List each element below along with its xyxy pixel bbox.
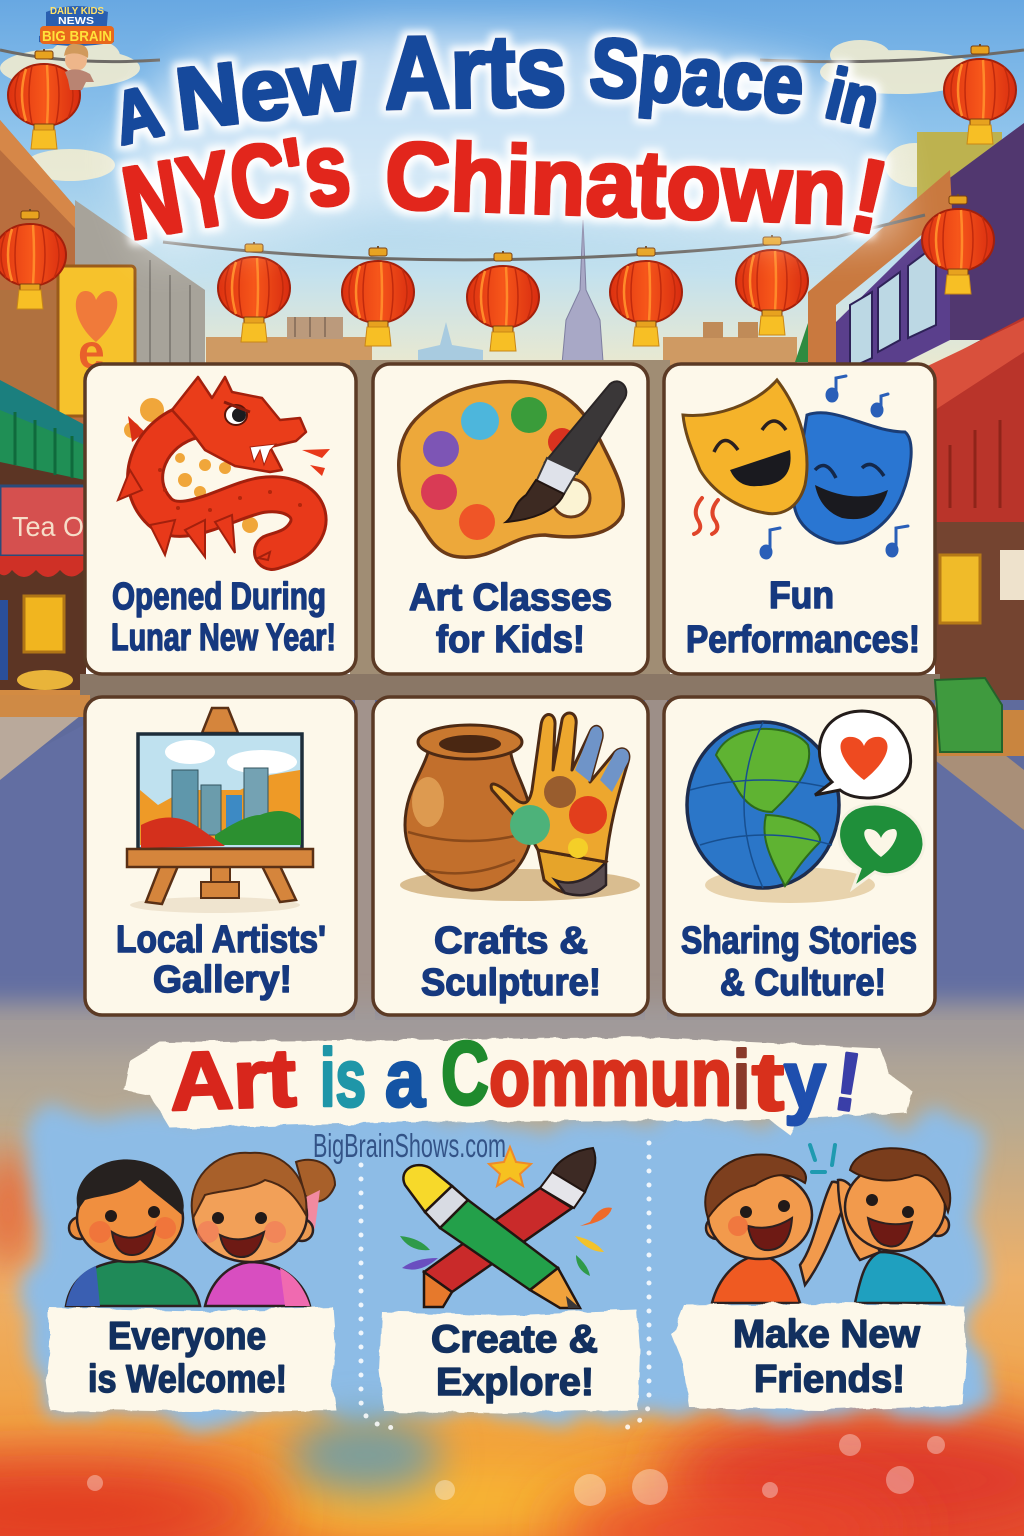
panel: sharing stories and culture [664, 697, 935, 1015]
heading: t [752, 1037, 784, 1128]
icon: painted hand [491, 713, 629, 895]
heading: a [385, 1033, 426, 1124]
background: lower watercolor wash [0, 1002, 1024, 1536]
title: New [170, 28, 363, 149]
icon: star [489, 1147, 531, 1186]
heading: Art [168, 1033, 298, 1128]
logo: Daily Kids News with Big Brain: BIG BRAIN [42, 28, 112, 45]
icon: heart speech bubble [815, 711, 911, 798]
title [105, 13, 897, 263]
title glow [115, 28, 900, 255]
logo: Daily Kids News with Big Brain: DAILY KIDS [50, 6, 104, 17]
label: Art Classes [409, 577, 612, 619]
title: Arts [383, 13, 567, 132]
logo: Daily Kids News with Big Brain: NEWS [58, 16, 94, 27]
icon: globe [687, 722, 875, 903]
label [409, 577, 612, 661]
label: Lunar New Year! [111, 617, 336, 659]
caption: create and explore: Explore! [436, 1361, 594, 1404]
shop sign with heart: e [78, 326, 105, 379]
dotted dividers [361, 1143, 649, 1428]
title: Chinatown [383, 122, 849, 245]
label: Fun [769, 575, 834, 617]
icon: music notes [761, 376, 908, 558]
caption: create and explore [379, 1310, 640, 1413]
panel: opened during lunar new year [85, 364, 356, 674]
tea shop sign: Tea O [12, 511, 84, 542]
illustration: crossed pencil and paintbrush [400, 1147, 612, 1308]
caption: make new friends: Make New [733, 1313, 921, 1356]
illustration: two smiling kids [66, 1153, 335, 1306]
label: Crafts & [434, 920, 588, 962]
heading: C [441, 1024, 489, 1124]
banner: art is a community [124, 1024, 911, 1135]
caption: everyone is welcome [46, 1307, 336, 1412]
label: & Culture! [720, 962, 886, 1004]
background: clouds [0, 38, 980, 187]
label: Gallery! [153, 959, 292, 1001]
label: Sharing Stories [681, 920, 917, 962]
label [111, 576, 336, 659]
label: Local Artists' [116, 919, 326, 961]
title: in [819, 54, 887, 144]
logo: Daily Kids News with Big Brain [39, 6, 114, 90]
tea shop sign [0, 486, 85, 556]
panel: art classes for kids [373, 364, 648, 674]
watermark: BigBrainShows.com [313, 1127, 506, 1164]
label [681, 920, 917, 1004]
background: street [0, 360, 1024, 1040]
heading: i [733, 1035, 750, 1126]
caption: everyone is welcome: is Welcome! [88, 1358, 287, 1401]
background: sky [0, 0, 1024, 380]
panel: fun performances [664, 364, 935, 674]
background: skyline [206, 220, 826, 377]
illustration: two kids high five [705, 1145, 950, 1303]
heading [168, 1024, 866, 1129]
heading: ommun [489, 1032, 732, 1123]
title: ! [841, 137, 897, 257]
icon: green speech bubble [839, 804, 924, 888]
title: A [105, 69, 170, 161]
lantern strings [0, 50, 1024, 260]
label [686, 575, 920, 661]
green crate [935, 678, 1002, 752]
heading: is [320, 1033, 366, 1124]
panel: crafts and sculpture [373, 697, 648, 1015]
icon: red dragon [118, 377, 330, 560]
label: Sculpture! [421, 962, 601, 1004]
title: NYC's [115, 109, 358, 263]
caption: everyone is welcome: Everyone [108, 1315, 266, 1358]
caption: create and explore: Create & [431, 1318, 598, 1361]
panel: local artists gallery [85, 697, 356, 1015]
lanterns [0, 44, 1016, 351]
label [116, 919, 326, 1001]
caption: make new friends: Friends! [754, 1358, 905, 1401]
icon: palette and brush [399, 381, 626, 557]
label: for Kids! [436, 619, 585, 661]
logo mascot [64, 44, 94, 90]
shop sign with heart [58, 266, 135, 416]
caption: make new friends [672, 1303, 967, 1410]
label: Opened During [112, 576, 326, 618]
icon: easel with skyline painting [127, 708, 313, 913]
background: left buildings [0, 120, 205, 720]
background: right buildings [808, 123, 1024, 762]
heading: ! [829, 1036, 866, 1129]
icon: clay pot [400, 725, 640, 901]
heading: y [784, 1035, 826, 1126]
icon: yellow drama mask [683, 380, 807, 514]
icon: blue drama mask [794, 413, 911, 543]
label: Performances! [686, 619, 920, 661]
title: Space [586, 19, 808, 132]
label [421, 920, 601, 1004]
